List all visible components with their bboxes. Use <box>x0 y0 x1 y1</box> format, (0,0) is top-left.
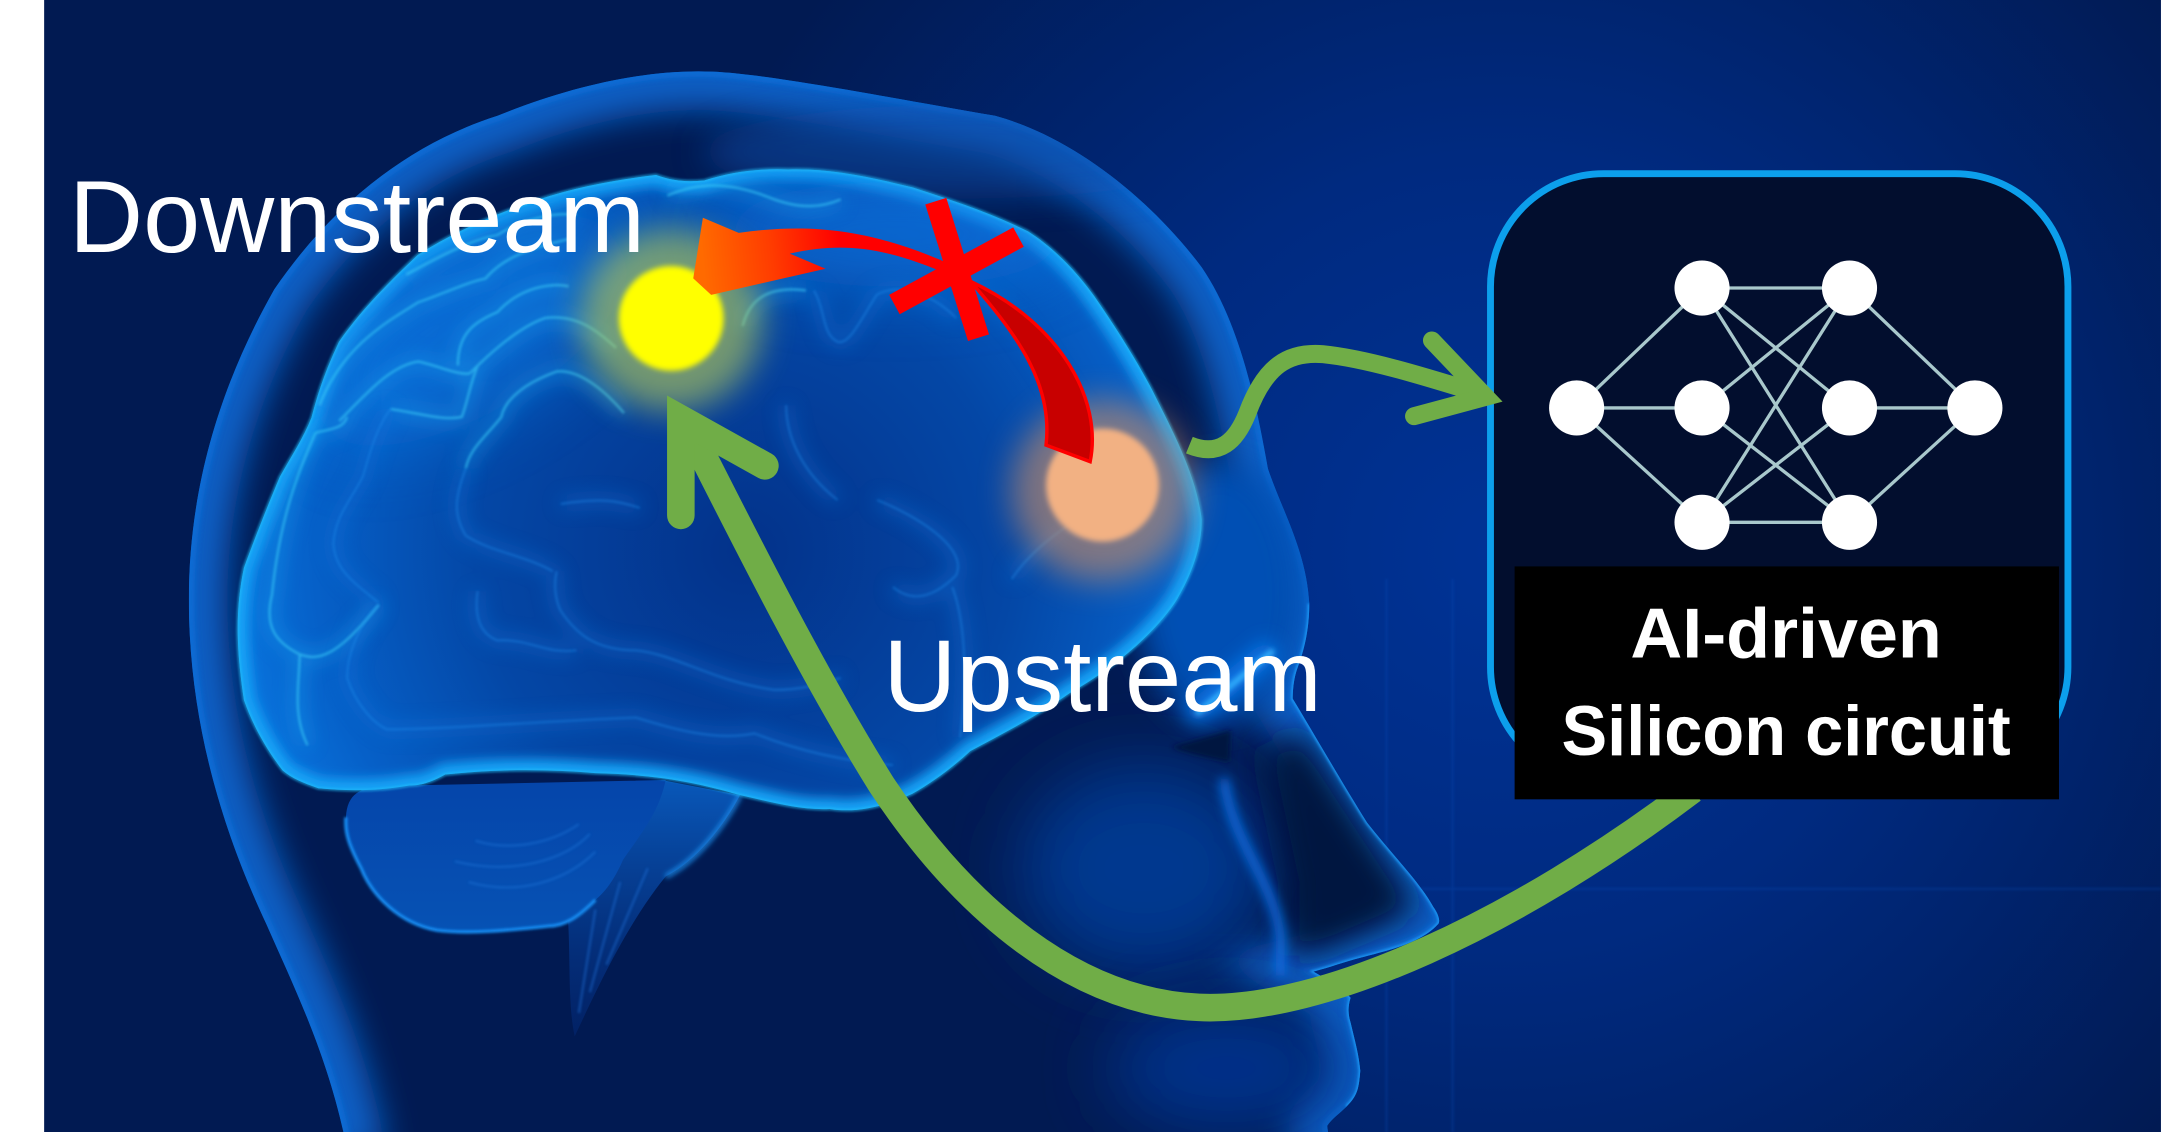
brain <box>238 169 1202 810</box>
heading: Upstream: Upstream <box>883 619 1322 733</box>
cerebellum and brain stem <box>346 780 740 1036</box>
head silhouette <box>189 71 1439 1132</box>
downstream activation halo <box>580 229 762 411</box>
red arrow lower segment <box>970 281 1092 462</box>
panel: AI-driven silicon circuit <box>1490 174 2068 780</box>
white left margin <box>0 0 44 1132</box>
label: AI-driven Silicon circuit <box>1515 566 2059 799</box>
small green output arrow <box>1189 340 1486 449</box>
red arrow upper segment <box>693 218 951 295</box>
upstream activation halo <box>1012 400 1194 582</box>
label: AI-driven Silicon circuit: Silicon circuit <box>1561 691 2011 770</box>
downstream spot <box>619 266 724 371</box>
red cross: blocked pathway <box>894 201 1018 338</box>
upstream spot <box>1046 429 1159 542</box>
heading: Downstream: Downstream <box>69 160 645 274</box>
neural network diagram <box>1549 260 2002 550</box>
label: AI-driven Silicon circuit: AI-driven <box>1630 593 1942 672</box>
background grid texture <box>1378 579 2161 1132</box>
large green feedback arrow <box>681 419 1692 1008</box>
